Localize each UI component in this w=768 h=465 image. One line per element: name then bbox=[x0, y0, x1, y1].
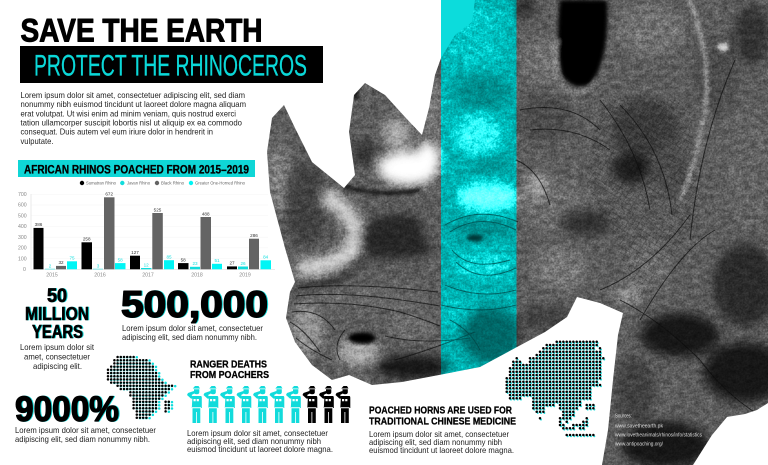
y axis: 600 bbox=[18, 203, 27, 209]
bars 2018 bbox=[178, 211, 222, 269]
x axis years: 2017 bbox=[142, 272, 154, 278]
x axis years: 2015 bbox=[46, 272, 58, 278]
neck skin cross hatching bbox=[585, 100, 700, 300]
subtitle banner: PROTECT THE RHINOCEROS bbox=[34, 50, 307, 82]
chart heading bar: AFRICAN RHINOS POACHED FROM 2015–2019 bbox=[24, 164, 249, 176]
bars 2015 bbox=[34, 222, 77, 269]
bars 2018: 51 bbox=[214, 258, 220, 263]
section: ranger deaths bbox=[187, 358, 350, 454]
stat caption: adipiscing elit. bbox=[33, 361, 82, 371]
intro paragraph: consequat. Duis autem vel eum iriure dolor in hendrerit in bbox=[20, 126, 213, 136]
bars 2019 bbox=[227, 233, 271, 269]
caption: Lorem ipsum dolor sit amet, consectetuer bbox=[122, 323, 263, 333]
pictogram: seven of ten rangers in cyan bbox=[187, 386, 350, 423]
bars 2015: 386 bbox=[35, 222, 43, 227]
caption: Lorem ipsum dolor sit amet, consectetuer bbox=[187, 428, 328, 438]
bars 2019: 286 bbox=[250, 233, 258, 238]
stat: 50 million years bbox=[20, 286, 95, 371]
bars 2015: 32 bbox=[58, 260, 64, 265]
y axis: 500 bbox=[18, 213, 27, 219]
caption bbox=[15, 425, 156, 444]
heading: TRADITIONAL CHINESE MEDICINE bbox=[369, 416, 516, 428]
y axis bbox=[18, 192, 275, 273]
greyscale rhino skin bbox=[260, 0, 768, 465]
y axis: 700 bbox=[18, 192, 27, 198]
bars 2017: 525 bbox=[154, 207, 162, 212]
stat caption bbox=[20, 342, 95, 371]
x axis years: 2016 bbox=[94, 272, 106, 278]
heading: FROM POACHERS bbox=[190, 369, 269, 381]
big number: 500,000 bbox=[121, 284, 268, 325]
stat: 9000% bbox=[15, 390, 156, 444]
stat heading: 50 bbox=[47, 286, 67, 307]
stat heading: MILLION bbox=[25, 304, 89, 324]
intro paragraph: nonummy nibh euismod tincidunt ut laoreet dolore magna aliquam bbox=[20, 99, 246, 109]
bars 2017: 12 bbox=[144, 262, 149, 267]
heading: RANGER DEATHS bbox=[190, 358, 267, 370]
caption: Lorem ipsum dolor sit amet, consectetuer bbox=[15, 425, 156, 435]
sources: Sources: bbox=[615, 414, 632, 420]
cyan tinted strip over the eye bbox=[441, 0, 516, 375]
x axis years: 2019 bbox=[239, 272, 251, 278]
bars 2015: 75 bbox=[69, 256, 75, 261]
intro paragraph: vulputate. bbox=[20, 136, 54, 146]
y axis: 100 bbox=[18, 256, 27, 262]
bars 2016: 672 bbox=[105, 192, 113, 197]
chart legend: Greater One-Horned Rhino bbox=[195, 181, 245, 186]
big number: 9000% bbox=[15, 390, 119, 429]
bars 2015: 2 bbox=[49, 264, 52, 268]
caption: Lorem ipsum dolor sit amet, consectetuer bbox=[369, 429, 509, 439]
bars 2018: 58 bbox=[181, 257, 186, 262]
caption bbox=[187, 428, 333, 454]
sources: www.antipoaching.org/ bbox=[615, 442, 664, 448]
x axis years: 2018 bbox=[191, 272, 203, 278]
icon: dotted map of Africa bbox=[108, 357, 175, 418]
bars 2019: 27 bbox=[229, 261, 235, 266]
subtitle banner bbox=[20, 46, 323, 83]
stat heading: YEARS bbox=[32, 322, 83, 342]
x axis years bbox=[46, 272, 251, 278]
bars 2016: 258 bbox=[83, 237, 91, 242]
bars 2017: 127 bbox=[131, 250, 139, 255]
intro paragraph: Lorem ipsum dolor sit amet, consectetuer adipiscing elit, sed diam bbox=[20, 90, 245, 100]
bars 2017 bbox=[130, 207, 174, 269]
bar chart bbox=[18, 192, 275, 278]
bars 2017: 85 bbox=[166, 254, 172, 260]
chart legend: Sumatran Rhino bbox=[86, 181, 116, 186]
sources: www.savetheearth.pk bbox=[615, 424, 663, 430]
bars 2019: 84 bbox=[263, 255, 269, 260]
stat caption: amet, consectetuer bbox=[24, 352, 90, 362]
skin grain bbox=[260, 0, 768, 465]
cyan vertical band behind the head bbox=[441, 0, 516, 70]
chart legend: Black Rhino bbox=[161, 181, 184, 186]
heading: POACHED HORNS ARE USED FOR bbox=[369, 404, 512, 416]
caption bbox=[369, 429, 514, 455]
skin wrinkles bbox=[290, 60, 768, 420]
bars 2016 bbox=[82, 192, 126, 269]
stat: 500,000 bbox=[121, 284, 268, 342]
bars 2016: 58 bbox=[118, 257, 123, 262]
caption: euismod tincidunt ut laoreet dolore magna. bbox=[187, 444, 333, 454]
intro paragraph: tation ullamcorper suscipit lobortis nisl ut aliquip ex ea commodo bbox=[20, 118, 242, 128]
sources: www.lovetheanimals/rhinos/info/statistics bbox=[615, 433, 702, 439]
caption: adipiscing elit, sed diam nonummy nibh. bbox=[122, 332, 257, 342]
rhinoceros head photo illustration bbox=[260, 0, 768, 465]
caption: adipiscing elit, sed diam nonummy nibh bbox=[187, 436, 321, 446]
bars 2018: 23 bbox=[192, 261, 198, 266]
stat caption: Lorem ipsum dolor sit bbox=[20, 342, 95, 352]
caption bbox=[122, 323, 263, 342]
chart legend bbox=[80, 181, 245, 186]
caption: adipiscing elit, sed diam nonummy nibh. bbox=[15, 434, 150, 444]
y axis: 400 bbox=[18, 224, 27, 230]
intro paragraph bbox=[20, 90, 246, 146]
skin mottling bbox=[260, 0, 768, 465]
bars 2019: 26 bbox=[240, 261, 246, 266]
bars 2018: 488 bbox=[202, 211, 210, 216]
intro paragraph: erat volutpat. Ut wisi enim ad minim veniam, quis nostrud exerci bbox=[20, 108, 236, 118]
title: SAVE THE EARTH bbox=[20, 12, 262, 48]
chart heading bar bbox=[18, 160, 255, 177]
y axis: 300 bbox=[18, 235, 27, 241]
y axis: 0 bbox=[23, 267, 26, 273]
caption: euismod tincidunt ut laoreet dolore magna. bbox=[369, 445, 514, 455]
chart legend: Javan Rhino bbox=[127, 181, 150, 186]
bars 2016: 3 bbox=[97, 264, 100, 268]
heading bbox=[190, 358, 269, 381]
sources bbox=[615, 414, 702, 448]
y axis: 200 bbox=[18, 246, 27, 252]
section: poached horns bbox=[369, 404, 516, 455]
stat heading bbox=[25, 286, 89, 342]
heading bbox=[369, 404, 516, 428]
caption: adipiscing elit, sed diam nonummy nibh bbox=[369, 437, 502, 447]
icon: dotted map of Asia bbox=[507, 342, 604, 436]
